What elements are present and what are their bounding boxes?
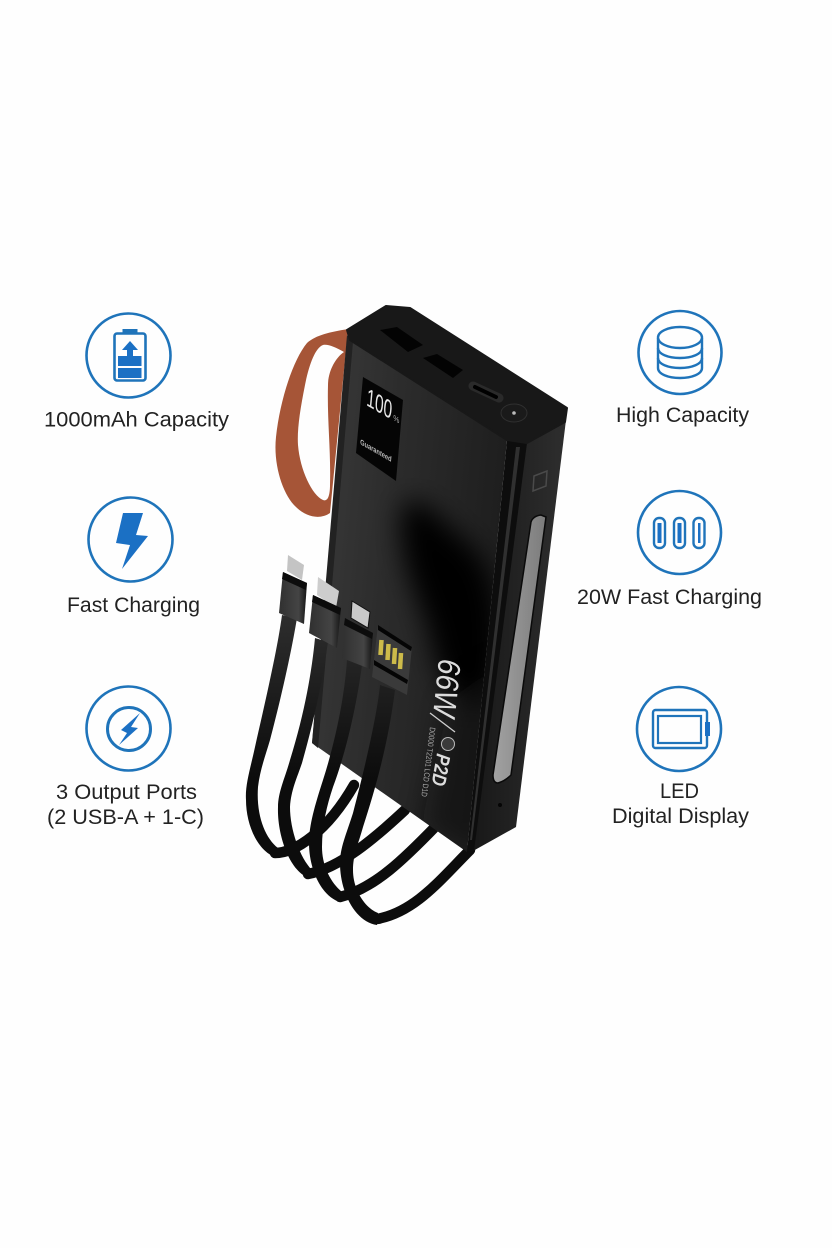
- cable loops behind body: [275, 785, 470, 919]
- USB-C port: [473, 386, 499, 398]
- connector: USB-A: [372, 625, 412, 695]
- digital screen: [356, 377, 403, 481]
- infographic canvas: [46, 305, 761, 925]
- brand badge: [442, 738, 454, 750]
- USB-A ports: [380, 327, 463, 378]
- cable 1 ribbon: [246, 615, 297, 858]
- label: 20W Fast Charging: [577, 585, 762, 609]
- label: [47, 780, 204, 829]
- left edge highlight: [312, 335, 353, 748]
- front face: [312, 338, 507, 852]
- LED light strip: [493, 515, 546, 783]
- feature: fast charging: [67, 498, 200, 617]
- battery body: [312, 306, 567, 860]
- 66W print: 66W: [426, 657, 468, 721]
- feature: LED digital display: [612, 687, 749, 828]
- cables in front of body: [246, 615, 395, 925]
- label: [612, 779, 749, 828]
- icon: lightning bolt: [88, 498, 172, 582]
- icon: battery charging: [86, 314, 170, 398]
- product: power bank with cables: [246, 306, 567, 925]
- label: 3 Output Ports: [56, 780, 197, 804]
- label: High Capacity: [616, 403, 749, 427]
- small print: D0000 T2201 LCD D1D: [419, 727, 437, 798]
- icon: three ports: [638, 491, 721, 574]
- feature: 1000mAh capacity: [44, 314, 229, 432]
- wrist strap: [275, 329, 348, 517]
- label: Fast Charging: [67, 593, 200, 617]
- feature: output ports: [47, 686, 204, 829]
- digital screen: Guaranteed: [360, 437, 392, 464]
- connector: USB-C 2: [309, 577, 341, 648]
- dark reflection: [401, 501, 505, 860]
- label: Digital Display: [612, 804, 749, 828]
- label: LED: [660, 779, 699, 803]
- feature: high capacity: [616, 311, 749, 427]
- top face: [347, 306, 567, 443]
- power button: [501, 404, 527, 422]
- icon: display battery: [637, 687, 721, 771]
- icon: stacked cells: [638, 311, 722, 394]
- slash divider: [430, 713, 455, 732]
- label: (2 USB-A + 1-C): [47, 805, 204, 829]
- corner chamfer: [467, 440, 527, 852]
- side button: [533, 471, 547, 491]
- cable 3 ribbon: [309, 660, 362, 902]
- reset pinhole: [498, 803, 502, 807]
- connector: micro USB: [342, 601, 373, 669]
- digital screen: 100: [365, 383, 393, 425]
- cable 4 ribbon: [340, 685, 395, 925]
- feature: 20W fast charging: [577, 491, 762, 609]
- digital screen: %: [393, 413, 400, 426]
- connector: USB-C 1: [279, 555, 307, 624]
- icon: energy circle: [86, 686, 170, 770]
- P2D print: P2D: [427, 752, 454, 787]
- side panel: [473, 420, 566, 851]
- cable 2 ribbon: [278, 638, 328, 878]
- label: 1000mAh Capacity: [44, 408, 229, 432]
